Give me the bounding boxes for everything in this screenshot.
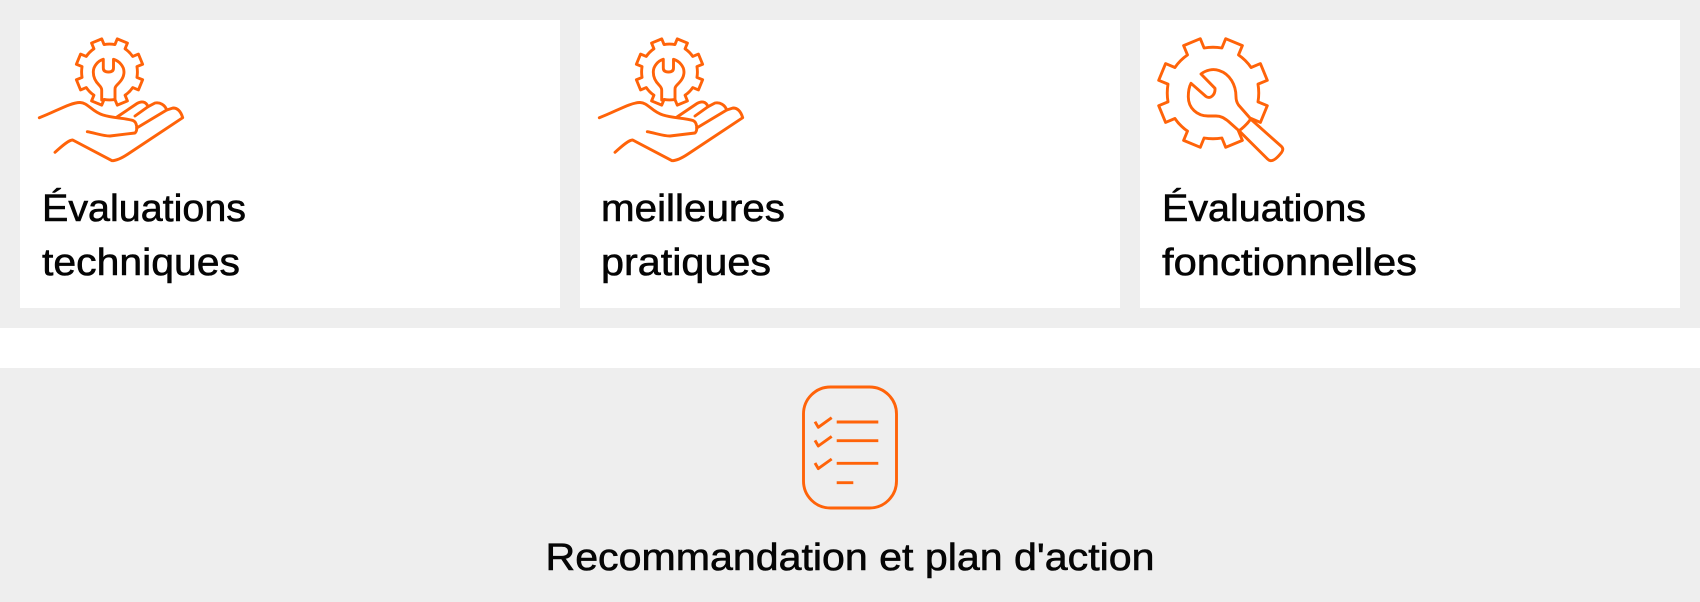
label: Évaluations techniques: techniques [42, 242, 240, 284]
panel: Évaluations fonctionnelles [1140, 20, 1680, 308]
bottom grey band [0, 368, 1700, 602]
label: meilleures pratiques: pratiques [601, 242, 771, 284]
icon: gear with wrench [1159, 39, 1283, 161]
label: Évaluations fonctionnelles: fonctionnelles [1162, 242, 1417, 284]
icon: hand holding gear and wrench [39, 39, 183, 161]
label: Évaluations techniques [42, 187, 246, 284]
label: meilleures pratiques: meilleures [601, 188, 785, 230]
icon: checklist [804, 387, 896, 508]
label: Évaluations fonctionnelles: Évaluations [1162, 187, 1366, 230]
top grey band [0, 0, 1700, 328]
icon: hand holding gear and wrench [599, 39, 743, 161]
label: Évaluations fonctionnelles [1162, 187, 1417, 284]
panel: Recommandation et plan d'action [546, 387, 1154, 579]
label: Évaluations techniques: Évaluations [42, 187, 246, 230]
panel: meilleures pratiques [580, 20, 1120, 308]
label: Recommandation et plan d'action: Recommandation et plan d'action [546, 537, 1154, 579]
label: meilleures pratiques [601, 188, 785, 284]
panel: Évaluations techniques [20, 20, 560, 308]
